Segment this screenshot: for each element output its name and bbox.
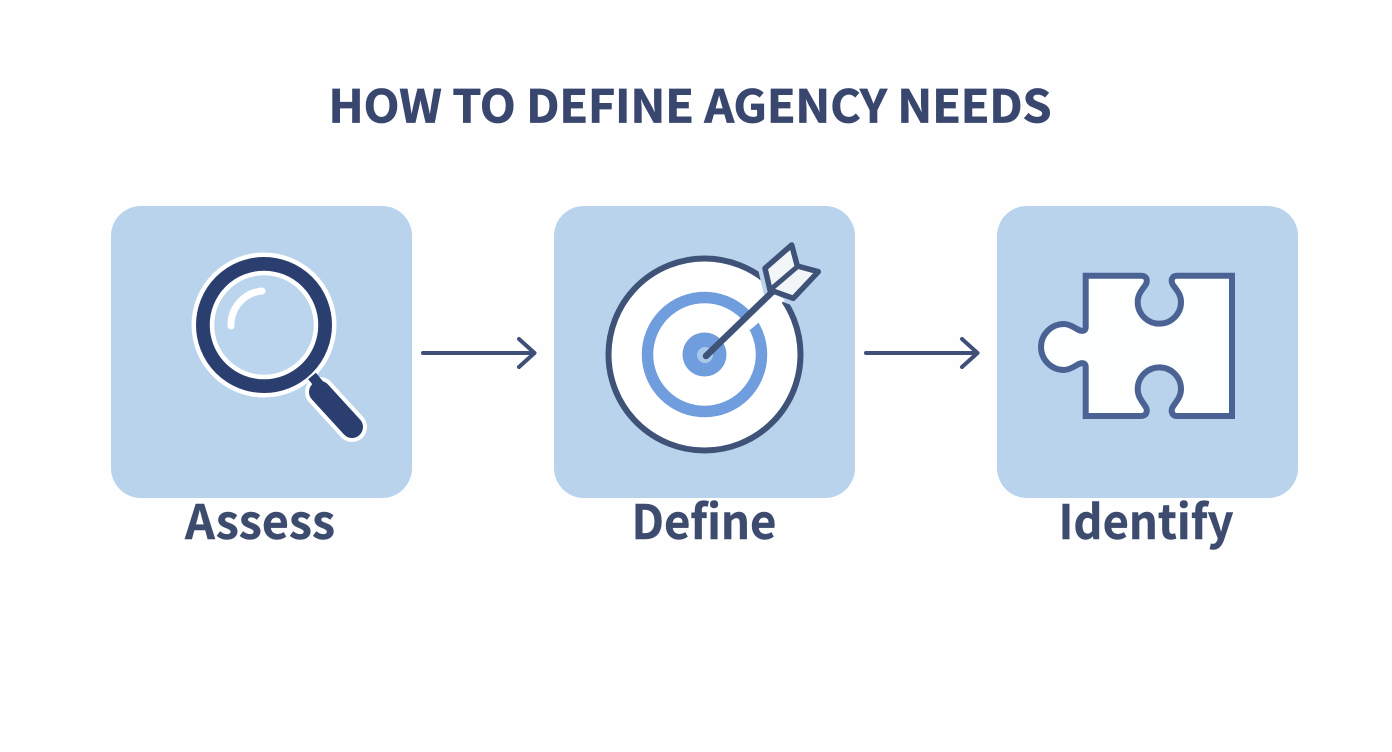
label: assess: Assess	[184, 484, 335, 553]
panel: identify	[997, 206, 1298, 498]
icon: puzzle piece	[1041, 276, 1232, 416]
label: define: Define	[632, 484, 776, 553]
label: identify: Identify	[1058, 484, 1234, 553]
icon: target with arrow	[608, 245, 818, 450]
title: HOW TO DEFINE AGENCY NEEDS	[328, 70, 1052, 136]
panel: define	[554, 206, 855, 498]
arrow: assess to define	[423, 339, 534, 367]
panel: assess	[111, 206, 412, 498]
arrow: define to identify	[866, 339, 978, 367]
icon: magnifying glass	[192, 252, 352, 427]
